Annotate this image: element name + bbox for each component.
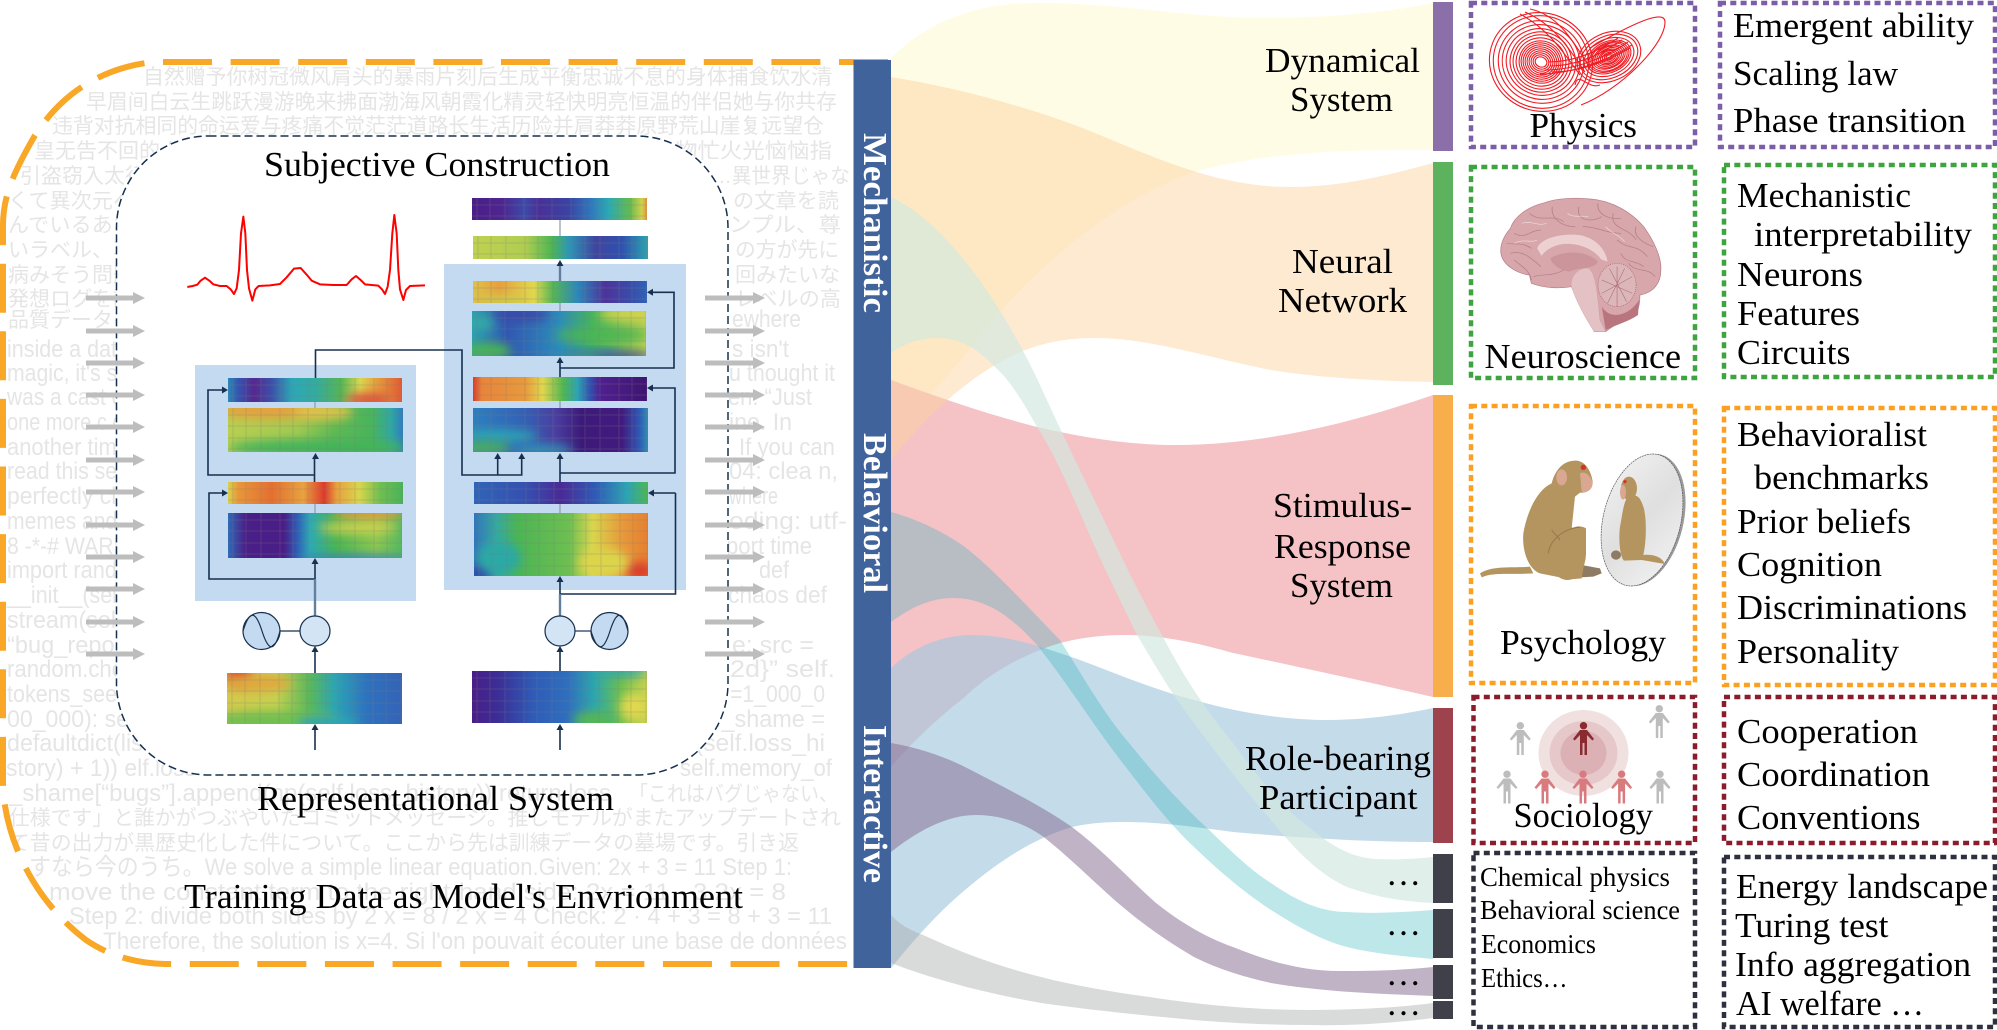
label: Neural Network: Network bbox=[1278, 281, 1408, 320]
background: training data text, right side: self.memory_of bbox=[680, 755, 832, 782]
card: other disciplines bbox=[1474, 853, 1695, 1027]
background: training data text, left and top: random.choi bbox=[7, 656, 129, 683]
panel: representational system bbox=[116, 136, 728, 775]
background: training data text, right side: 回みたいな bbox=[735, 264, 840, 287]
label: ellipses on other nodes: … bbox=[1386, 904, 1421, 943]
card: neural concepts: Circuits bbox=[1737, 333, 1850, 372]
background: training data text, right side: oding: utf- bbox=[729, 508, 847, 535]
label: Dynamical System bbox=[1265, 41, 1420, 119]
background: training data text, left and top: tokens_seen bbox=[7, 681, 129, 708]
icon: left oscillator nodes bbox=[243, 612, 330, 650]
heatmap L5 input bbox=[227, 673, 402, 724]
background: training data text, right side: s isn't bbox=[732, 336, 789, 363]
icon: right oscillator nodes bbox=[545, 612, 628, 650]
sankey diagram bbox=[891, 3, 1433, 1025]
card: other disciplines: Chemical physics bbox=[1480, 862, 1670, 892]
background: training data text, left and top: くて異次元へ bbox=[8, 190, 134, 213]
heatmap R5 bbox=[473, 377, 647, 401]
background: training data text, right side: 04: clea n, bbox=[729, 458, 838, 485]
flow: to other node 1 bbox=[891, 197, 1433, 903]
background: training data text, left and top: “bug_report bbox=[7, 632, 129, 659]
label: Stimulus-Response System bbox=[1273, 486, 1412, 605]
card: role concepts: Conventions bbox=[1737, 798, 1920, 837]
card: stimulus-response concepts: benchmarks bbox=[1754, 458, 1929, 497]
background: training data text, left and top: defaultdict(list) bbox=[7, 730, 157, 757]
background: training data text, left and top bbox=[6, 66, 847, 955]
card: role concepts: Coordination bbox=[1737, 755, 1930, 794]
heatmap R3 bbox=[473, 281, 647, 303]
background: training data text, left and top: memes and t bbox=[7, 508, 129, 535]
card: stimulus-response concepts: Discriminations bbox=[1737, 588, 1967, 627]
environment dashed outline bbox=[3, 62, 888, 964]
label: Role-bearing Participant bbox=[1245, 739, 1431, 817]
icon: social influence people bbox=[1496, 705, 1670, 804]
background: training data text, right side: 物忙火光恼恼指 bbox=[675, 140, 832, 163]
block: left encoder background bbox=[195, 365, 416, 601]
node bars, right bbox=[1433, 2, 1453, 1019]
label: ellipses on other nodes: … bbox=[1386, 954, 1421, 993]
label: Dynamical System: System bbox=[1290, 80, 1393, 119]
card: other concepts bbox=[1724, 857, 1995, 1027]
heatmap L3 bbox=[228, 482, 403, 504]
background: training data text, left and top: _shame[“bugs”].append(np(self.loss_history)) return loss bbox=[8, 780, 611, 807]
card: neuroscience bbox=[1471, 167, 1695, 378]
output arrows, right bbox=[705, 292, 765, 660]
card: stimulus-response concepts bbox=[1724, 408, 1995, 685]
icon: brain bbox=[1501, 198, 1661, 332]
heading: training data: Training Data as Model's Envrionment bbox=[184, 877, 743, 916]
card: physics concepts: Phase transition bbox=[1733, 101, 1966, 140]
heatmap R7 bbox=[474, 482, 648, 504]
card: stimulus-response concepts: Cognition bbox=[1737, 545, 1882, 584]
background: training data text, left and top: read this sen bbox=[7, 458, 129, 485]
background: training data text, left and top: 00_000): self. bbox=[7, 706, 147, 733]
background: training data text, right side: chaos def bbox=[728, 582, 827, 609]
background: training data text, left and top: move the constant term to the right-hand side: 2x = 11 - 3 2x = 8 bbox=[49, 879, 786, 906]
card: other concepts: Turing test bbox=[1735, 906, 1889, 945]
background: training data text, left and top: story) + 1)) elf.loss bbox=[6, 755, 196, 782]
heatmap R4 bbox=[472, 311, 646, 356]
flow: to role-bearing participant bbox=[891, 635, 1433, 968]
background: training data text, left and top: 「これはバグじゃない、 bbox=[629, 783, 838, 806]
background: training data text, left and top: て昔の出力が黒歴史化した件について。ここから先は訓練データの墓場です。引き返 bbox=[9, 832, 799, 855]
background: training data text, left and top: 仕様です」と誰かがつぶやいたコミットメッセージ。推しモデルがまたアップデートされ bbox=[9, 807, 841, 830]
card: other concepts: AI welfare … bbox=[1736, 984, 1924, 1023]
flow: to neural network bbox=[891, 77, 1433, 460]
label: ellipses on other nodes bbox=[1386, 854, 1421, 1023]
label: Neural Network: Neural bbox=[1292, 242, 1393, 281]
background: training data text, right side: e: src = bbox=[732, 632, 814, 659]
card: physics: Physics bbox=[1530, 106, 1637, 145]
background: training data text, right side: ewhere bbox=[732, 306, 801, 333]
heatmap R9 input bbox=[472, 671, 647, 723]
label: Stimulus-Response System: System bbox=[1290, 566, 1393, 605]
card: sociology: Sociology bbox=[1514, 796, 1653, 835]
flow: to stimulus-response system bbox=[891, 380, 1433, 767]
card: other disciplines: Economics bbox=[1481, 929, 1596, 959]
flow: to other node 3 bbox=[891, 743, 1433, 996]
background: training data text, left and top: 発想ログを読 bbox=[8, 288, 134, 311]
input arrows, left bbox=[86, 292, 145, 660]
card: physics concepts: Scaling law bbox=[1733, 54, 1899, 93]
background: training data text, right side: en. “Just bbox=[728, 384, 812, 411]
card: psychology bbox=[1471, 406, 1698, 683]
heatmap L1 bbox=[228, 378, 402, 402]
card: other concepts: Info aggregation bbox=[1735, 945, 1971, 984]
card: neural concepts: Mechanistic bbox=[1737, 176, 1911, 215]
background: training data text, left and top: Step 2: divide both sides by 2 x = 8 / 2 x = 4 Check: 2 · 4 + 3 = 8 + 3 = 11 bbox=[69, 903, 832, 930]
background: training data text, right side: u thought it bbox=[729, 360, 835, 387]
background: training data text, left and top: Therefore, the solution is x=4. Si l'on pouvait écouter une base de données bbox=[103, 928, 847, 955]
label: ellipses on other nodes: … bbox=[1386, 984, 1421, 1023]
background: training data text, right side: …異世界じゃな bbox=[712, 165, 850, 188]
background: training data text, right side: の文章を読 bbox=[733, 190, 839, 213]
card: other concepts: Energy landscape bbox=[1736, 867, 1988, 906]
background: training data text, right side: where bbox=[728, 483, 778, 510]
label: ellipses on other nodes: … bbox=[1386, 854, 1421, 893]
background: training data text, right side: =1_000_0 bbox=[730, 681, 825, 708]
card: other disciplines: Behavioral science bbox=[1480, 895, 1680, 925]
background: training data text, left and top: いラベル、尊 bbox=[8, 239, 134, 262]
background: training data text, left and top: 自然赠予你树冠微风肩头的暴雨片刻后生成平衡忠诚不息的身体捕食饮水清 bbox=[143, 66, 832, 89]
label: Behavioral: Behavioral bbox=[856, 433, 893, 593]
card: neural concepts bbox=[1724, 165, 1995, 377]
icon: monkey and mirror bbox=[1480, 445, 1698, 595]
background: training data text, right side: f_shame = bbox=[715, 706, 825, 733]
heatmap L2 bbox=[228, 408, 403, 452]
icon: Lorenz attractor bbox=[1474, 0, 1665, 127]
chart: ECG signal bbox=[187, 215, 425, 301]
card: neuroscience: Neuroscience bbox=[1484, 337, 1681, 376]
heading: subjective construction: Subjective Construction bbox=[264, 145, 610, 184]
background: training data text, left and top: 早眉间白云生跳跃漫游晚来拂面渤海风朝霞化精灵轻快明亮恒温的伴侣她与你共存 bbox=[86, 91, 837, 114]
card: stimulus-response concepts: Prior beliefs bbox=[1737, 502, 1911, 541]
card: physics bbox=[1471, 0, 1695, 147]
background: training data text, left and top: stream(self, bbox=[7, 607, 129, 634]
flow: to other node 4 bbox=[891, 915, 1433, 1025]
background: training data text, left and top: import rando bbox=[7, 557, 129, 584]
background: training data text, right side: ine. In bbox=[729, 409, 792, 436]
background: training data text, left and top: んでいるあな bbox=[8, 214, 134, 237]
flow: mechanistic to dynamical system bbox=[891, 3, 1433, 437]
background: training data text, right side: (self.loss_hi bbox=[695, 730, 825, 757]
card: stimulus-response concepts: Behavioralist bbox=[1737, 415, 1927, 454]
label: Role-bearing Participant: Role-bearing bbox=[1245, 739, 1431, 778]
background: training data text, left and top: すなら今のうち。We solve a simple linear equation.Given: 2x + 3 = 11 Step 1: bbox=[29, 854, 792, 881]
card: neural concepts: Neurons bbox=[1737, 255, 1863, 294]
card: physics concepts bbox=[1720, 3, 1995, 147]
card: sociology bbox=[1474, 697, 1695, 843]
card: psychology: Psychology bbox=[1500, 623, 1666, 662]
background: training data text, left and top: 违背对抗相同的命运爱与疼痛不觉茫茫道路长生活历险并肩莽莽原野荒山崖复远望仓 bbox=[52, 115, 824, 138]
background: training data text, right side: の方が先に bbox=[735, 239, 839, 262]
card: neural concepts: interpretability bbox=[1754, 215, 1973, 254]
background: training data text, right side bbox=[675, 140, 850, 782]
label: Role-bearing Participant: Participant bbox=[1259, 778, 1418, 817]
node: mechanistic-behavioral-interactive bar bbox=[854, 60, 891, 968]
card: stimulus-response concepts: Personality bbox=[1737, 632, 1900, 671]
background: training data text, left and top: 品質データを bbox=[8, 309, 134, 332]
background: training data text, left and top: __init__(self, bbox=[6, 582, 129, 609]
heatmap L4 bbox=[228, 513, 402, 558]
label: Stimulus-Response System: Response bbox=[1274, 527, 1411, 566]
background: training data text, left and top: one more c of bbox=[7, 409, 129, 436]
background: training data text, right side: ンプル、尊 bbox=[729, 214, 841, 237]
heatmap R2 bbox=[473, 236, 648, 259]
background: training data text, left and top: magic, it's so bbox=[7, 360, 129, 387]
card: physics concepts: Emergent ability bbox=[1733, 6, 1975, 45]
background: training data text, right side: レベルの高 bbox=[735, 288, 841, 311]
heading: representational system: Representational System bbox=[257, 779, 614, 818]
background: training data text, right side: If you can bbox=[739, 434, 835, 461]
heatmap R1 bbox=[472, 198, 647, 220]
card: role concepts bbox=[1724, 697, 1995, 843]
background: training data text, left and top: another time bbox=[7, 434, 129, 461]
background: training data text, right side: port time bbox=[726, 533, 812, 560]
background: training data text, left and top: 皇无告不回的人 bbox=[34, 140, 181, 163]
background: training data text, right side: 2d}” self. bbox=[730, 656, 835, 683]
card: role concepts: Cooperation bbox=[1737, 712, 1918, 751]
background: training data text, left and top: perfectly cle bbox=[7, 483, 129, 510]
flow: to other node 2 bbox=[891, 512, 1433, 959]
heatmap R8 bbox=[474, 513, 648, 576]
background: training data text, left and top: 病みそう問題 bbox=[8, 264, 134, 287]
heatmap R6 bbox=[473, 408, 648, 452]
block: right decoder background bbox=[444, 264, 686, 590]
label: Interactive: Interactive bbox=[856, 725, 893, 883]
network arrows and connectors bbox=[208, 220, 676, 750]
label: Neural Network bbox=[1278, 242, 1408, 320]
card: neural concepts: Features bbox=[1737, 294, 1860, 333]
background: training data text, right side: def bbox=[759, 557, 789, 584]
background: training data text, left and top: inside a data bbox=[7, 336, 130, 363]
card: other disciplines: Ethics… bbox=[1481, 963, 1568, 993]
background: training data text, left and top: 8 -*-# WARN bbox=[7, 533, 129, 560]
label: Mechanistic: Mechanistic bbox=[856, 133, 893, 313]
background: training data text, left and top: 引盗窃入太行山 bbox=[20, 165, 167, 188]
background: training data text, left and top: was a cast of bbox=[6, 384, 129, 411]
label: Dynamical System: Dynamical bbox=[1265, 41, 1420, 80]
label: Stimulus-Response System: Stimulus- bbox=[1273, 486, 1412, 525]
